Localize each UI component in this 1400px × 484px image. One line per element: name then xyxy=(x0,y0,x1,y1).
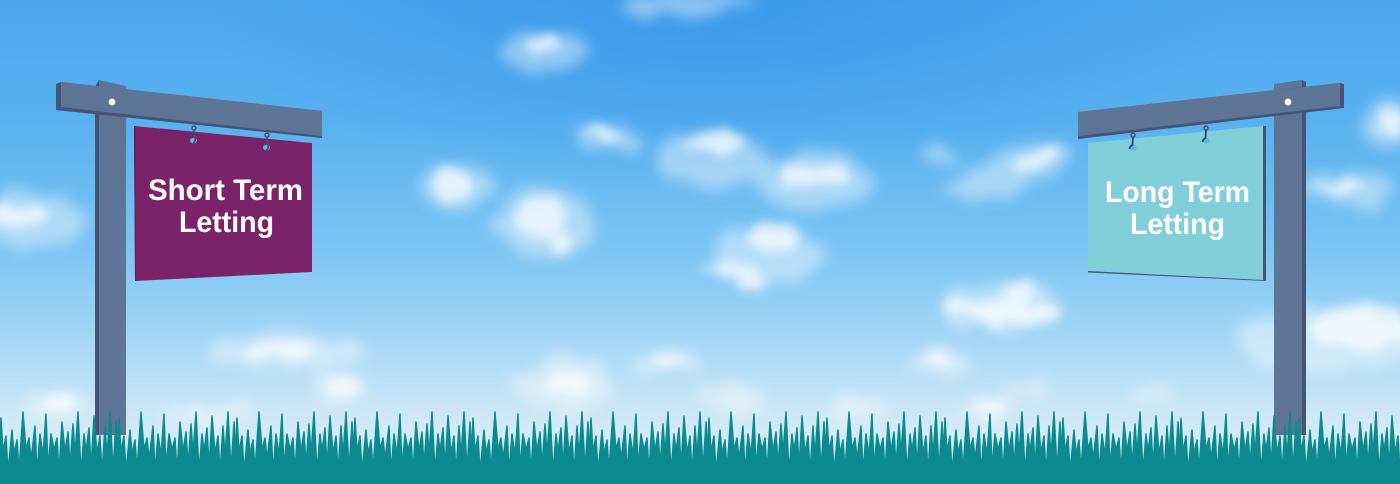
sign text: left xyxy=(148,174,303,239)
post: right xyxy=(1274,110,1306,435)
post: left xyxy=(95,110,126,435)
sign text: left: Short Term xyxy=(148,174,303,207)
left signpost xyxy=(56,80,322,435)
right signpost xyxy=(1078,80,1344,435)
beam: right xyxy=(1078,80,1344,139)
sign board: Long Term Letting xyxy=(1088,126,1266,281)
grass strip xyxy=(0,410,1400,484)
sign text: right xyxy=(1105,176,1250,241)
sign text: right: Long Term xyxy=(1105,176,1250,209)
beam: left xyxy=(56,80,322,138)
sign text: left: Letting xyxy=(179,206,274,239)
sign hooks: left xyxy=(190,126,270,150)
sign text: right: Letting xyxy=(1130,208,1225,241)
sign hooks: right xyxy=(1130,126,1210,150)
sign board: Short Term Letting xyxy=(134,126,312,281)
